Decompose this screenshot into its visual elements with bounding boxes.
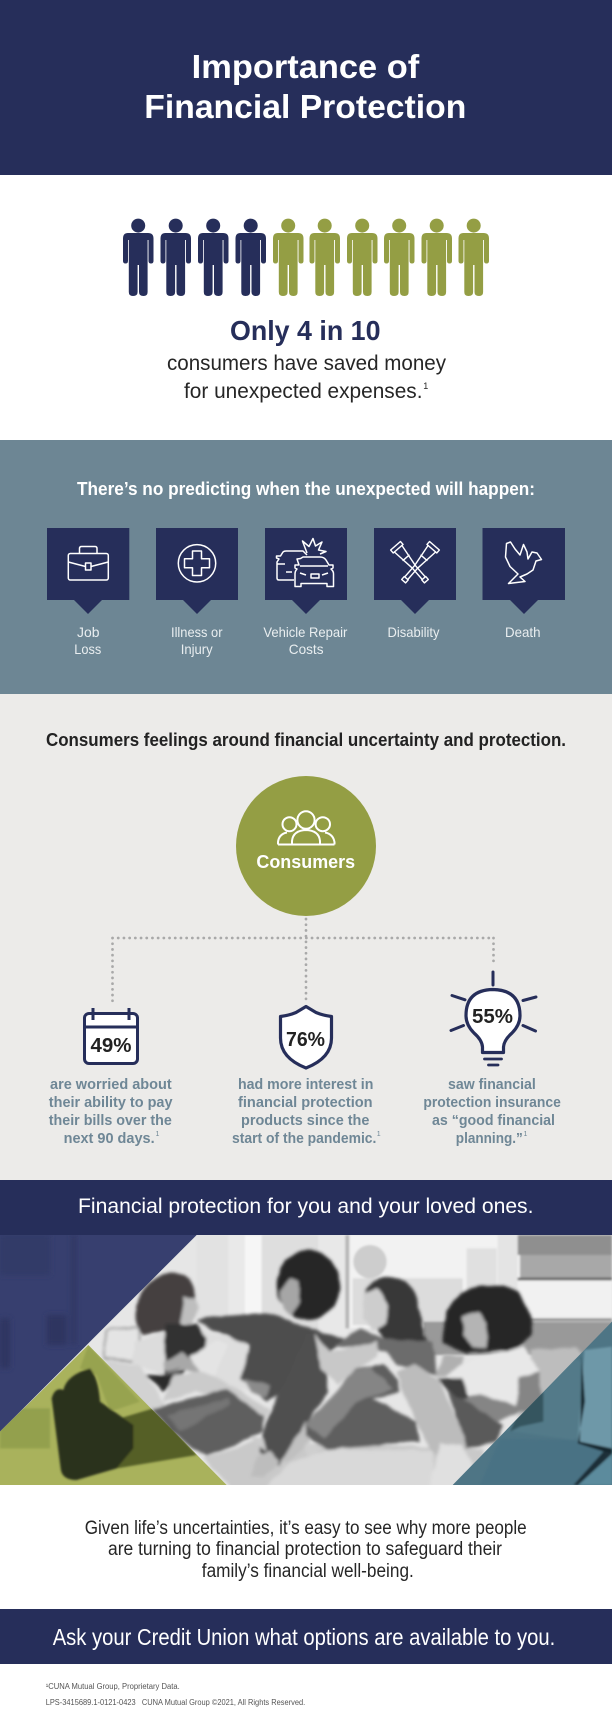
- heading: Consumers feelings around financial uncertainty and protection.: [46, 730, 566, 750]
- child hair: [136, 1273, 195, 1335]
- icon: light bulb: [451, 972, 536, 1065]
- child leg: [163, 1372, 270, 1423]
- node: consumers: [236, 776, 376, 916]
- description: 1: [377, 1131, 381, 1138]
- description: their ability to pay: [49, 1094, 173, 1111]
- photo: family reading on a couch: [0, 1235, 612, 1492]
- callout: death: [482, 528, 565, 640]
- cushion: [516, 1346, 582, 1420]
- figure: 49%: [90, 1034, 132, 1057]
- girl hair: [443, 1285, 533, 1353]
- footnotes: LPS-3415689.1-0121-0423 CUNA Mutual Group ©2021, All Rights Reserved.: [46, 1698, 305, 1707]
- description: 1: [156, 1131, 160, 1138]
- panel: unexpected events: [0, 440, 612, 694]
- callout: disability: [374, 528, 456, 640]
- icon: dove: [506, 542, 542, 584]
- description: protection insurance: [423, 1094, 561, 1111]
- description: saw financial: [448, 1076, 536, 1093]
- text block: closing statement: Given life’s uncertainties, it’s easy to see why more people: [85, 1518, 527, 1539]
- statistic text: [167, 351, 446, 403]
- icon: medical cross: [178, 545, 216, 582]
- description: are worried about: [50, 1076, 172, 1093]
- description: their bills over the: [49, 1112, 172, 1129]
- callout: job loss: [47, 528, 129, 657]
- label: Loss: [74, 641, 101, 657]
- pictogram: ten people, four highlighted: [123, 219, 489, 296]
- label: [171, 624, 223, 657]
- icon: group of people: [278, 811, 334, 844]
- statistic text: consumers have saved money: [167, 351, 446, 375]
- footnotes: ¹CUNA Mutual Group, Proprietary Data.: [46, 1682, 180, 1691]
- icon: shield: [280, 1006, 332, 1068]
- icon: briefcase: [68, 546, 108, 580]
- woman sweater: [333, 1328, 437, 1375]
- description: [232, 1076, 381, 1147]
- stat: 55 percent: [423, 972, 561, 1147]
- description: 1: [524, 1131, 528, 1138]
- man hair: [277, 1250, 340, 1320]
- text block: closing statement: family’s financial well-being.: [202, 1561, 414, 1582]
- description: had more interest in: [238, 1076, 373, 1093]
- description: planning.”: [456, 1130, 523, 1147]
- girl shirt: [447, 1347, 540, 1405]
- text block: closing statement: are turning to financial protection to safeguard their: [108, 1539, 503, 1560]
- description: [49, 1076, 173, 1147]
- open book: [314, 1333, 378, 1385]
- icon: calendar: [84, 1008, 138, 1064]
- girl shorts: [445, 1387, 504, 1450]
- label: Death: [505, 624, 540, 640]
- label: Consumers: [256, 852, 355, 872]
- label: Job: [77, 624, 100, 640]
- couch seat: [203, 1442, 483, 1492]
- callout: illness or injury: [156, 528, 238, 657]
- icon: colliding cars: [276, 538, 334, 586]
- child hand and book: [163, 1352, 200, 1373]
- girl arm: [460, 1372, 543, 1425]
- statistic text: for unexpected expenses.: [184, 379, 422, 403]
- footnotes: [46, 1682, 305, 1707]
- woman hair: [363, 1277, 433, 1348]
- man torso: [197, 1313, 343, 1402]
- description: financial protection: [238, 1094, 373, 1111]
- couch arm: [105, 1328, 140, 1362]
- stat: 76 percent: [232, 1006, 381, 1147]
- callout: vehicle repair costs: [263, 528, 348, 657]
- raised leg: [258, 1361, 330, 1467]
- label: Vehicle Repair: [263, 624, 348, 640]
- banner text: Ask your Credit Union what options are available to you.: [53, 1624, 555, 1650]
- banner: financial protection: [0, 1180, 612, 1235]
- description: next 90 days.: [64, 1130, 155, 1147]
- description: start of the pandemic.: [232, 1130, 376, 1147]
- description: as “good financial: [432, 1112, 555, 1129]
- icon: crossed crutches: [391, 541, 439, 585]
- description: products since the: [241, 1112, 369, 1129]
- heading: There’s no predicting when the unexpected will happen:: [77, 478, 535, 499]
- label: Disability: [388, 624, 440, 640]
- pillow: [105, 1360, 165, 1408]
- statistic text: 1: [423, 381, 428, 391]
- label: Illness or: [171, 624, 223, 640]
- statistic heading: Only 4 in 10: [230, 315, 380, 346]
- title: Importance of: [192, 48, 420, 86]
- title: Financial Protection: [144, 88, 466, 126]
- man jeans: [152, 1390, 263, 1457]
- connector: dotted lines: [112, 919, 494, 1002]
- label: Injury: [181, 641, 213, 657]
- stat: 49 percent: [49, 1008, 173, 1147]
- navy overlay: [0, 1235, 197, 1432]
- panel: consumer feelings: [0, 694, 612, 1180]
- banner text: Financial protection for you and your loved ones.: [78, 1194, 534, 1218]
- text block: closing statement: [0, 1485, 612, 1609]
- title: [144, 48, 466, 126]
- navy overlay texture: [0, 1235, 76, 1368]
- label: [263, 624, 348, 657]
- green overlay: [0, 1345, 227, 1485]
- figure: 76%: [286, 1029, 325, 1051]
- woman jeans: [306, 1363, 419, 1450]
- panel: 4 in 10 statistic: [0, 175, 612, 440]
- title banner: [0, 0, 612, 175]
- label: Costs: [289, 641, 324, 657]
- figure: 55%: [472, 1005, 513, 1028]
- girl sock: [432, 1442, 473, 1485]
- label: [74, 624, 101, 657]
- teal overlay: [450, 1318, 612, 1488]
- girl leg: [397, 1363, 467, 1458]
- banner: call to action: [0, 1609, 612, 1664]
- girl hand: [434, 1355, 463, 1377]
- child cardigan: [133, 1332, 167, 1375]
- description: [423, 1076, 561, 1147]
